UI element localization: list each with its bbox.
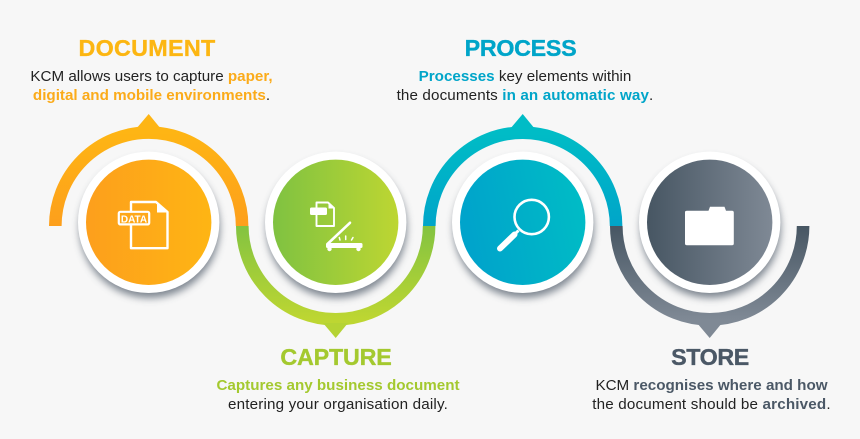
heading: capture: CAPTURE bbox=[280, 344, 392, 370]
heading: store: STORE bbox=[671, 344, 749, 370]
description: document bbox=[30, 68, 273, 104]
circle: document bbox=[78, 152, 220, 298]
heading: process: PROCESS bbox=[465, 35, 576, 61]
description: document: KCM allows users to capture paper, bbox=[30, 68, 273, 85]
icon: data document bbox=[119, 202, 168, 248]
circle: store bbox=[639, 152, 781, 298]
description: store bbox=[592, 377, 831, 413]
heading: document: DOCUMENT bbox=[78, 35, 216, 61]
description: document: digital and mobile environments. bbox=[33, 87, 270, 104]
arc: store bbox=[616, 226, 803, 338]
arc: capture bbox=[242, 226, 429, 338]
arc: process bbox=[429, 114, 616, 226]
description: process bbox=[396, 68, 653, 104]
description: capture: Captures any business document bbox=[216, 377, 460, 394]
icon: data document: DATA bbox=[121, 214, 147, 226]
description: store: the document should be archived. bbox=[592, 396, 831, 413]
icon: scanner bbox=[310, 202, 362, 251]
description: process: Processes key elements within bbox=[419, 68, 631, 85]
text block: store bbox=[592, 344, 831, 413]
text block: document bbox=[30, 35, 273, 104]
description: process: the documents in an automatic way. bbox=[397, 87, 653, 104]
description: capture bbox=[216, 377, 460, 413]
circle: capture bbox=[265, 152, 407, 298]
arc: document bbox=[55, 114, 242, 226]
icon: folder bbox=[685, 207, 734, 245]
circle: process bbox=[452, 152, 594, 298]
description: capture: entering your organisation daily. bbox=[228, 396, 448, 413]
description: store: KCM recognises where and how bbox=[595, 377, 828, 394]
text block: process bbox=[396, 35, 653, 104]
text block: capture bbox=[216, 344, 460, 413]
icon: magnifier bbox=[500, 200, 549, 248]
